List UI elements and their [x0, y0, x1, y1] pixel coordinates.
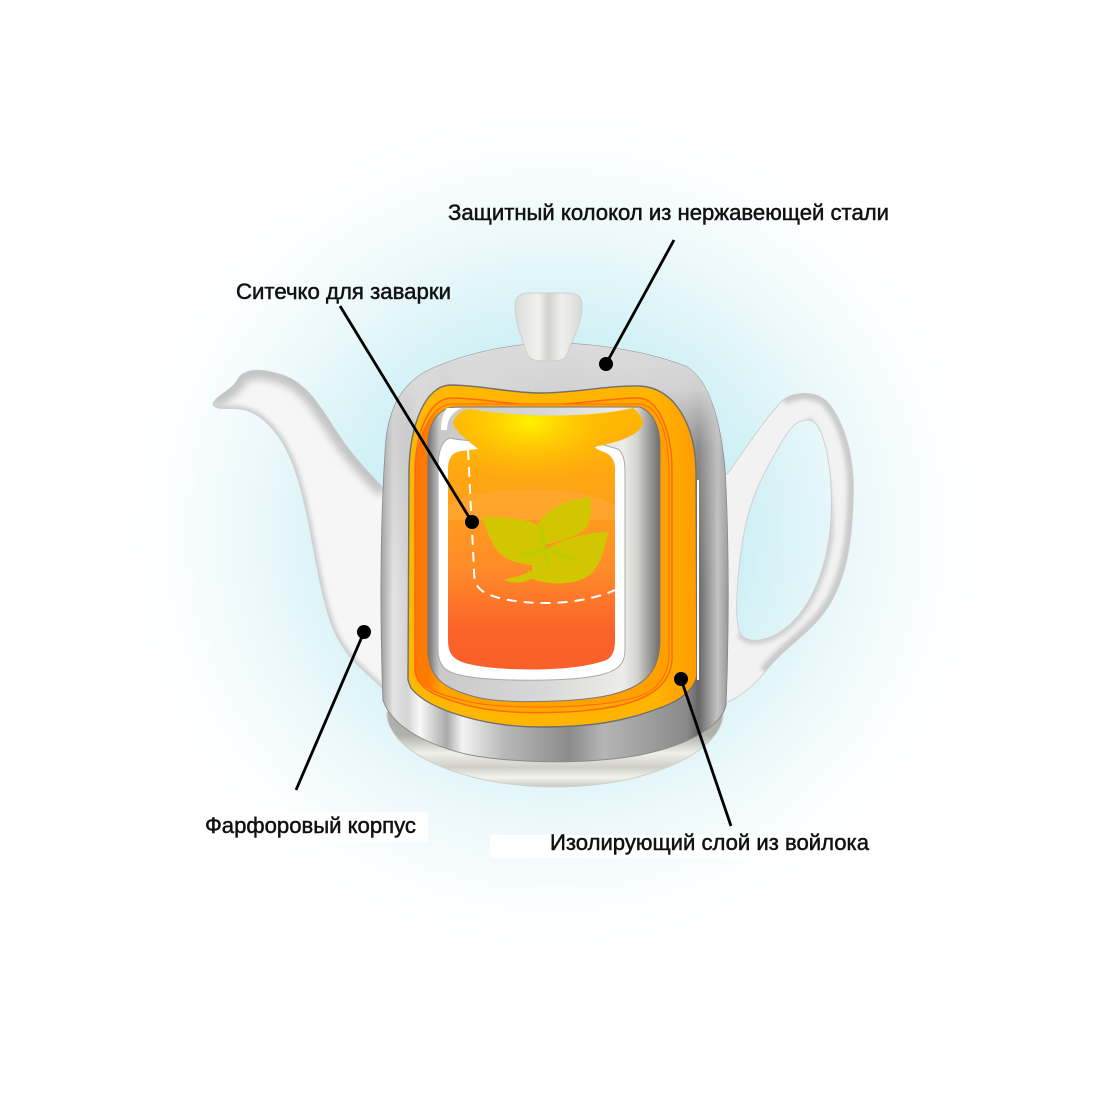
leader: porcelain body [296, 625, 371, 790]
felt orange line [415, 398, 672, 713]
tea surface highlight [448, 489, 615, 520]
bell dome shading [381, 343, 728, 705]
tea fill [448, 408, 643, 670]
bell body [381, 343, 728, 762]
porcelain body and spout [213, 370, 392, 700]
leader: bell [599, 240, 674, 371]
top right leaf [538, 497, 591, 545]
lid knob [515, 293, 582, 361]
tea leaves [482, 497, 608, 583]
flask lip highlight [441, 408, 462, 430]
inner steel flask [428, 407, 660, 702]
left leaf [482, 517, 548, 565]
yellow tea glow [448, 408, 643, 490]
base ring [387, 700, 723, 787]
label: porcelain body: Фарфоровый корпус [205, 813, 416, 838]
teapot cutaway infographic [192, 176, 918, 884]
porcelain handle [720, 393, 853, 705]
bell window white edge [697, 480, 699, 680]
tea liquid [448, 408, 643, 670]
dashed strainer outline [468, 450, 615, 603]
white porcelain vessel [438, 438, 625, 680]
leaf stem [504, 570, 534, 582]
right leaf [530, 532, 608, 583]
stainless steel bell [381, 343, 728, 762]
leader: strainer [340, 306, 479, 529]
label: strainer: Ситечко для заварки [236, 279, 451, 304]
white label patch left [196, 812, 428, 842]
white label patch right [490, 835, 875, 858]
leader: felt layer [674, 672, 731, 826]
felt orange band [416, 404, 669, 707]
felt outer yellow [408, 385, 697, 727]
label: felt layer: Изолирующий слой из войлока [550, 830, 870, 855]
label: stainless steel bell: Защитный колокол из нержавеющей стали [448, 200, 889, 225]
leaf vein glow [520, 525, 575, 565]
insulating felt layer [408, 385, 698, 727]
